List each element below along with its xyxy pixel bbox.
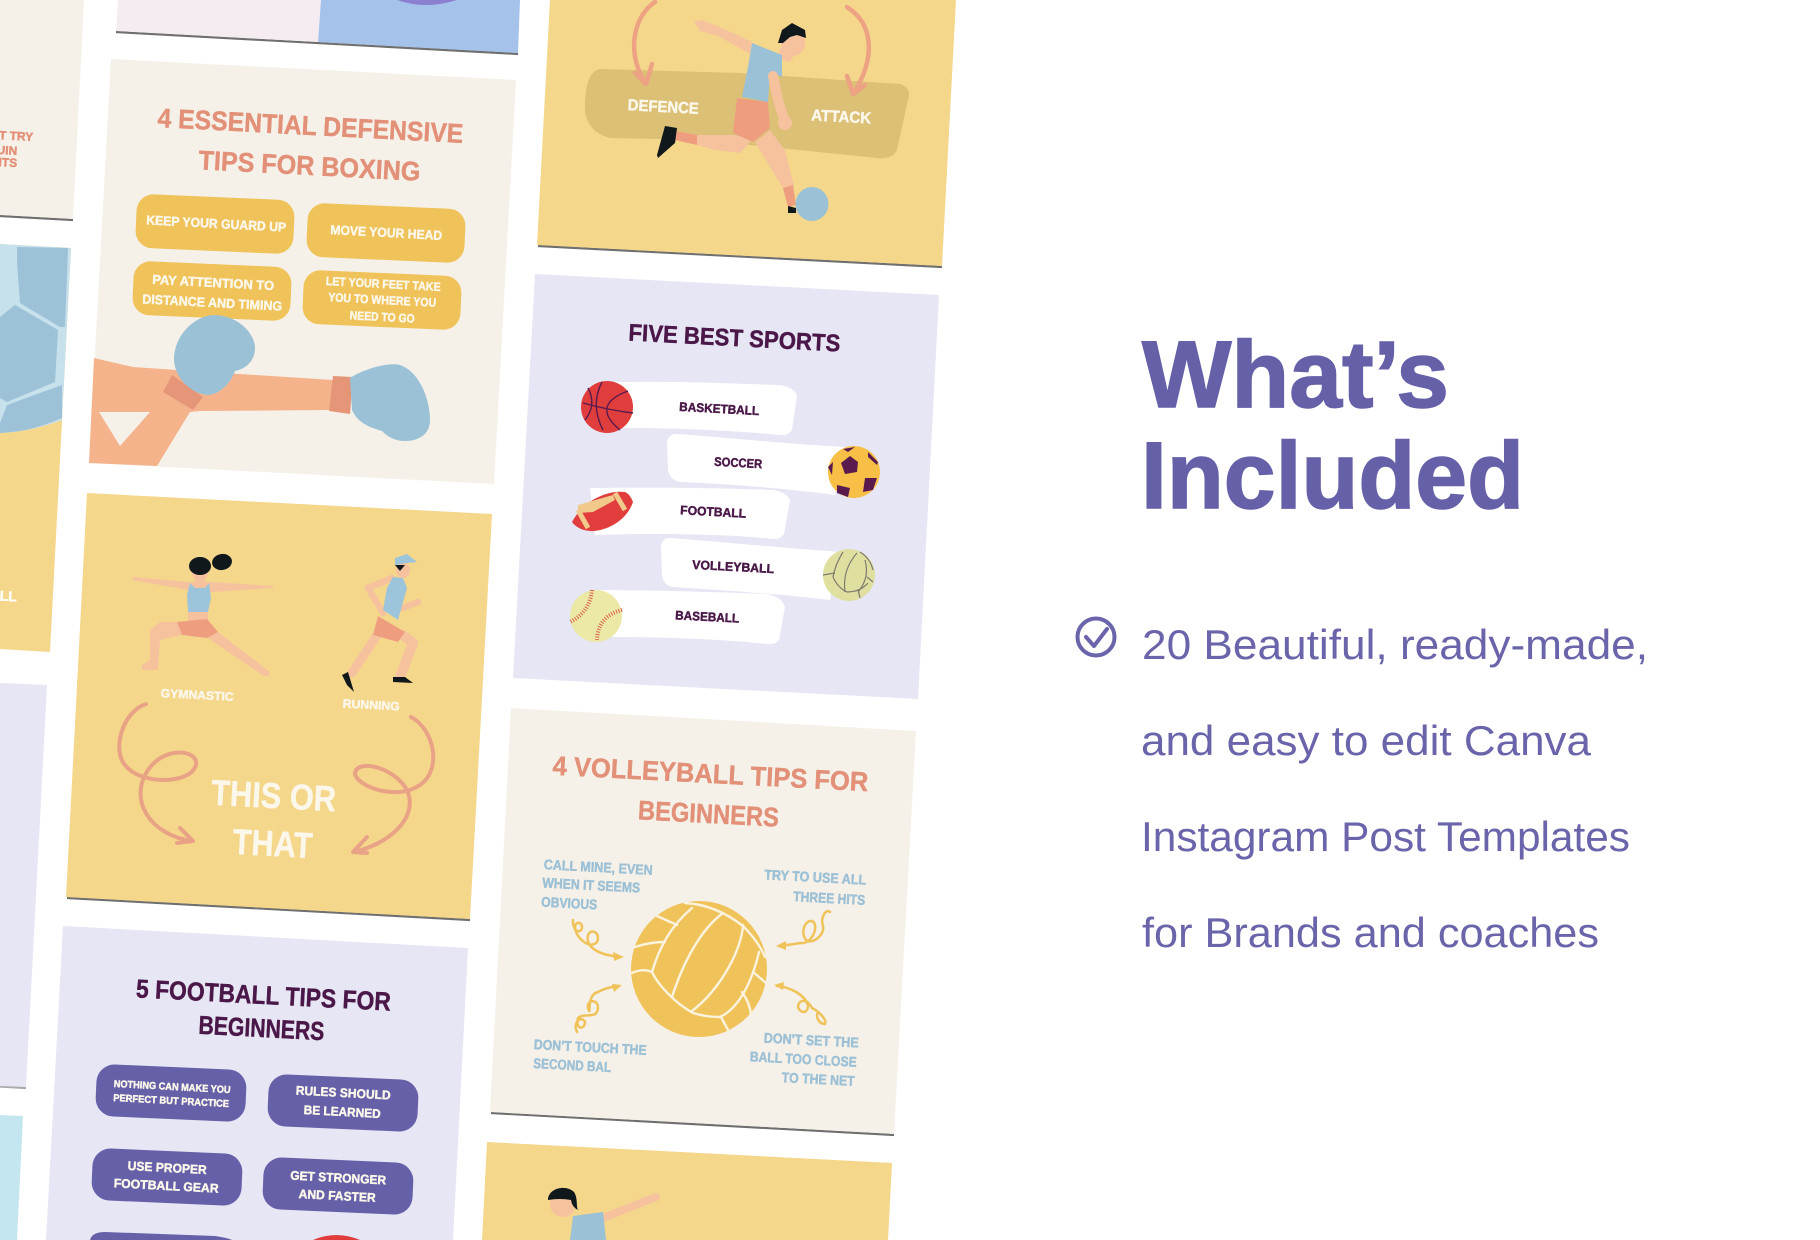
tip labels: football — [113, 1079, 391, 1205]
tips: volleyball: SECOND BAL — [533, 1055, 612, 1075]
text block: description: Instagram Post Templates — [1141, 813, 1630, 860]
illustration: football player — [657, 20, 828, 221]
tips: volleyball: TRY TO USE ALL — [764, 866, 867, 888]
tips: volleyball: OBVIOUS — [541, 894, 598, 912]
panel: this or that card — [66, 493, 492, 920]
panel: soccer ball card, column one — [0, 244, 71, 652]
title: What's Included: What’s — [1142, 322, 1449, 428]
row: baseball — [570, 590, 785, 644]
tip labels: football: BE LEARNED — [303, 1103, 381, 1121]
icon: cropped purple shape — [397, 0, 457, 5]
icon: basketball — [581, 381, 633, 433]
icon: baseball — [570, 590, 622, 642]
text block: description: and easy to edit Canva — [1141, 717, 1592, 764]
row: football: FOOTBALL — [680, 503, 747, 521]
tip labels: boxing — [142, 212, 443, 326]
labels: defence and attack — [627, 97, 872, 128]
tip labels: boxing: PAY ATTENTION TO — [152, 272, 275, 293]
icon: large cropped soccer ball — [0, 244, 71, 433]
arrow: defence — [634, 2, 655, 84]
tip labels: boxing: MOVE YOUR HEAD — [330, 222, 443, 243]
row: basketball — [581, 381, 797, 435]
title: What's Included: Included — [1141, 423, 1524, 529]
tips: volleyball — [533, 856, 867, 1089]
heading: football tips — [135, 973, 392, 1046]
panel: defence and attack card — [537, 0, 956, 267]
tips: volleyball: THREE HITS — [793, 888, 866, 908]
row: basketball: BASKETBALL — [679, 400, 760, 418]
icon: soccer ball — [828, 446, 880, 498]
tips: volleyball: DON'T SET THE — [763, 1030, 859, 1050]
icon: american football — [572, 492, 633, 531]
tip labels: boxing: YOU TO WHERE YOU — [328, 290, 437, 310]
illustration: cropped player — [548, 1188, 656, 1240]
tip labels: football: PERFECT BUT PRACTICE — [113, 1093, 230, 1110]
heading: this or that: THIS OR — [210, 772, 337, 819]
row: baseball: BASEBALL — [675, 608, 740, 626]
tip labels: football: NOTHING CAN MAKE YOU — [113, 1079, 231, 1096]
banner: darker stripe — [585, 69, 909, 158]
text block: description: for Brands and coaches — [1142, 909, 1599, 956]
illustration: boxer arms and gloves — [89, 315, 430, 466]
panel: light blue card, column one — [0, 1115, 23, 1240]
panel: football tips card — [46, 926, 468, 1240]
tips: volleyball: WHEN IT SEEMS — [542, 874, 641, 896]
illustration: gymnast — [133, 552, 273, 677]
panel: boxing tips card — [89, 59, 516, 484]
labels: defence and attack: DEFENCE — [627, 97, 699, 118]
tips: volleyball: CALL MINE, EVEN — [543, 856, 653, 878]
text block: description — [1141, 621, 1648, 956]
tip labels: boxing: DISTANCE AND TIMING — [142, 291, 283, 314]
panel: volleyball tips card — [490, 708, 916, 1135]
panel: partial cream card, column one — [0, 0, 84, 220]
title: What's Included — [1141, 322, 1524, 529]
panel: pink and blue card — [116, 0, 520, 54]
icon: check circle — [1078, 618, 1114, 656]
tip labels: boxing: NEED TO GO — [349, 308, 415, 326]
panel: five best sports card — [513, 274, 939, 699]
heading: volleyball tips: 4 VOLLEYBALL TIPS FOR — [552, 751, 869, 797]
arrow: right curl — [353, 717, 433, 853]
tip buttons: football — [90, 1064, 419, 1240]
heading: football tips: 5 FOOTBALL TIPS FOR — [135, 973, 392, 1017]
tips: volleyball: TO THE NET — [781, 1069, 856, 1089]
text block: description: 20 Beautiful, ready-made, — [1142, 621, 1648, 668]
heading: football tips: BEGINNERS — [198, 1010, 325, 1046]
row: volleyball: VOLLEYBALL — [692, 558, 775, 576]
arrow: left curl — [119, 704, 196, 843]
icon: volleyball — [631, 901, 767, 1037]
heading: this or that: THAT — [232, 821, 314, 866]
tips: volleyball: DON'T TOUCH THE — [533, 1036, 647, 1058]
tips: volleyball: BALL TOO CLOSE — [749, 1048, 857, 1070]
row: soccer — [667, 434, 880, 498]
tip labels: football: FOOTBALL GEAR — [113, 1176, 219, 1196]
heading: this or that — [210, 772, 337, 866]
row: volleyball — [661, 538, 875, 601]
tip labels: football: AND FASTER — [298, 1187, 376, 1205]
heading: boxing tips: TIPS FOR BOXING — [198, 145, 421, 187]
icon: volleyball — [823, 549, 875, 601]
row: football — [572, 488, 790, 539]
heading: volleyball tips: BEGINNERS — [637, 795, 780, 833]
tip labels: football: USE PROPER — [127, 1159, 207, 1177]
icon: cropped red ball — [313, 1235, 360, 1240]
labels: activities: GYMNASTIC — [160, 686, 234, 704]
arrows: four curly arrows — [573, 911, 830, 1032]
labels: activities — [160, 686, 400, 713]
illustration: runner — [342, 554, 418, 692]
tip labels: football: RULES SHOULD — [295, 1084, 391, 1102]
panel: lavender card, column one — [0, 683, 47, 1088]
heading: five best sports: FIVE BEST SPORTS — [628, 319, 841, 358]
heading: boxing tips: 4 ESSENTIAL DEFENSIVE — [157, 103, 464, 149]
heading: volleyball tips — [552, 751, 869, 833]
tip labels: boxing: KEEP YOUR GUARD UP — [146, 212, 287, 235]
row: soccer: SOCCER — [714, 455, 763, 471]
labels: activities: RUNNING — [342, 697, 400, 713]
tip labels: football: GET STRONGER — [290, 1169, 387, 1188]
text fragment: cropped coral tip — [0, 128, 34, 170]
arrow: attack — [847, 7, 869, 94]
heading: boxing tips — [157, 103, 464, 187]
labels: defence and attack: ATTACK — [811, 107, 872, 128]
tip labels: boxing: LET YOUR FEET TAKE — [325, 274, 441, 294]
panel: bottom yellow card — [482, 1142, 892, 1240]
tip buttons: boxing — [132, 194, 466, 330]
